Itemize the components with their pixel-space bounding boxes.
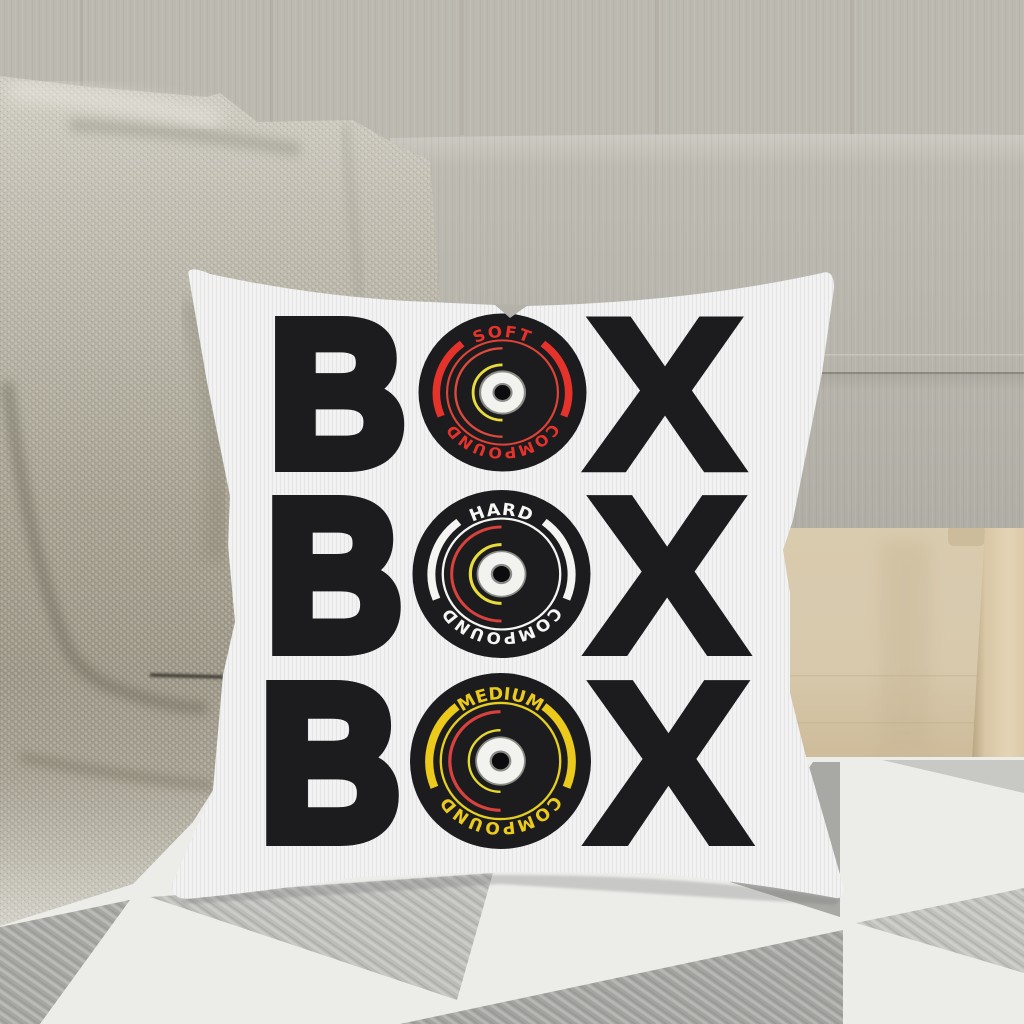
sofa rear leg — [948, 525, 985, 546]
tyre: hard compound — [412, 490, 590, 658]
row 2: BOX with hard compound tyre — [266, 449, 752, 741]
letter B: B — [266, 456, 403, 694]
tyre: medium compound: MEDIUM — [456, 687, 544, 711]
wooden floor — [760, 525, 1024, 760]
sofa front leg — [972, 528, 1024, 760]
blanket folds — [7, 90, 360, 786]
row 3: BOX with medium compound tyre — [260, 634, 756, 892]
letter X: X — [586, 274, 744, 516]
letter B: B — [260, 640, 401, 885]
knitted blanket — [0, 76, 440, 926]
letter X: X — [586, 449, 748, 701]
pillow shadow — [180, 875, 840, 905]
tyre: soft compound — [418, 314, 586, 472]
tyre: hard compound: HARD — [469, 502, 532, 522]
tyre: hard compound: COMPOUND — [444, 609, 560, 644]
tyre: medium compound: COMPOUND — [442, 798, 560, 835]
tyre: soft compound: SOFT — [473, 326, 532, 342]
tyre: medium compound — [410, 673, 591, 849]
pillow — [172, 269, 843, 899]
row 1: BOX with soft compound tyre — [269, 274, 749, 556]
area rug — [0, 757, 1024, 1024]
sofa base panel — [600, 372, 1024, 528]
letter X: X — [586, 634, 751, 892]
pillow top notch — [494, 304, 528, 318]
sofa back cushion — [0, 0, 1024, 150]
tyre: soft compound: COMPOUND — [448, 426, 558, 459]
sofa seat cushion — [390, 134, 1024, 374]
letter B: B — [269, 279, 406, 508]
